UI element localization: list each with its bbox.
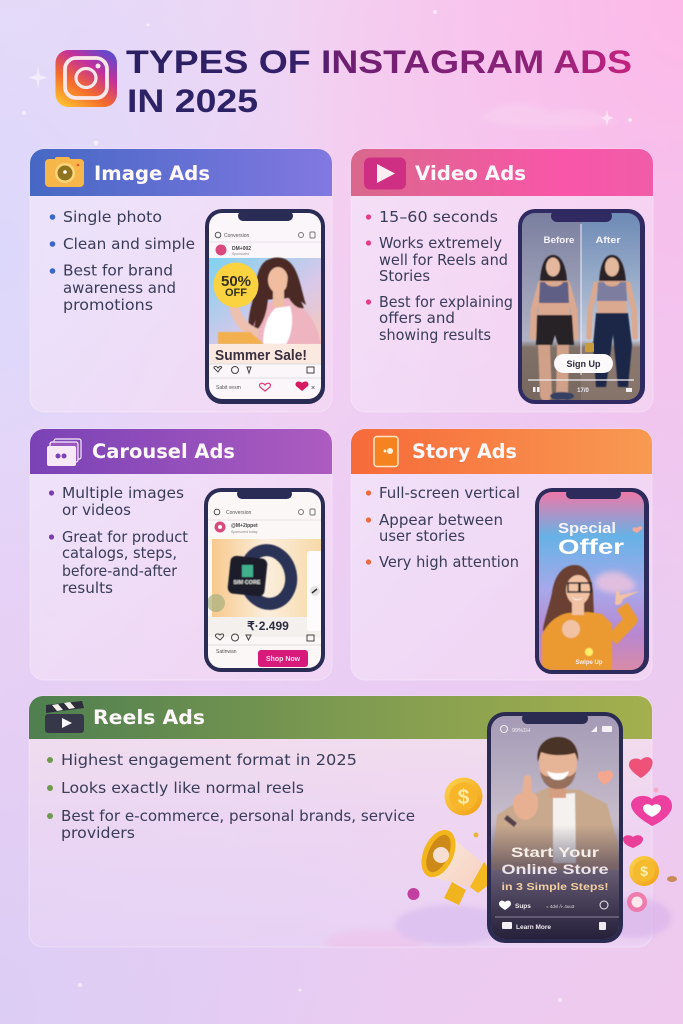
phone: reels ad: = 4dvl /i-.4uu3 [546, 904, 575, 909]
list: Image Ads bullets: Single photo [63, 208, 162, 226]
icon: play button [364, 158, 406, 190]
list: Image Ads bullets: awareness and [63, 279, 176, 297]
list: Carousel Ads bullets: or videos [62, 501, 131, 519]
list: Story Ads bullets: Appear between [379, 511, 503, 529]
header: Reels Ads: Reels Ads [93, 706, 205, 729]
list: Video Ads bullets [366, 208, 513, 344]
list: Reels Ads bullets: Looks exactly like normal reels [61, 779, 304, 797]
phone: Summer Sale post: Sabit vesm [216, 385, 241, 391]
icon: stacked cards [47, 439, 81, 466]
list: Carousel Ads bullets: results [62, 579, 113, 597]
list: Story Ads bullets: Very high attention [379, 553, 519, 571]
phone: reels ad: Start Your [511, 844, 600, 860]
panel: Video Ads [351, 149, 653, 412]
list: Carousel Ads bullets: before-and-after [62, 562, 178, 580]
icon: story card [374, 436, 398, 466]
phone: before and after video: 17/0 [577, 388, 589, 394]
title: IN 2025 [127, 83, 258, 119]
panel: Story Ads [351, 429, 652, 680]
phone: smartwatch carousel post: Satinwan [216, 649, 237, 655]
phone: reels ad: Sups [515, 903, 531, 910]
list: Image Ads bullets: promotions [63, 296, 153, 314]
title: TYPES OF INSTAGRAM ADS [126, 44, 632, 80]
phone: smartwatch carousel post: ₹·2.499 [247, 619, 289, 633]
icon: Instagram logo [56, 50, 117, 107]
list: Image Ads bullets: Best for brand [63, 262, 173, 280]
phone: reels ad: Online Store [502, 861, 609, 877]
phone: smartwatch carousel post: Shop Now [266, 656, 301, 663]
header: Video Ads: Video Ads [415, 162, 526, 185]
phone: reels ad: 99%1H [512, 728, 530, 734]
title [126, 44, 632, 119]
list: Carousel Ads bullets [49, 484, 188, 597]
header: Carousel Ads: Carousel Ads [92, 440, 235, 463]
phone: reels ad: in 3 Simple Steps! [502, 881, 608, 893]
phone: special offer story [535, 488, 649, 674]
icon: dollar coin left [444, 778, 482, 816]
icon: camera [45, 157, 84, 187]
icon: megaphone [408, 825, 489, 905]
list: Carousel Ads bullets: Great for product [62, 528, 188, 546]
header: Reels Ads [29, 696, 652, 739]
phone: Summer Sale post: 50% [221, 273, 251, 290]
phone: Summer Sale post: DM+002 [232, 246, 251, 252]
phone: special offer story: Special [558, 520, 616, 537]
phone: Summer Sale post: Summer Sale! [215, 348, 307, 364]
list: Reels Ads bullets [47, 751, 415, 842]
header: Carousel Ads [30, 429, 332, 474]
header: Story Ads: Story Ads [412, 440, 517, 463]
icons: floating hearts and coins [623, 757, 677, 912]
list: Video Ads bullets: Works extremely [379, 234, 502, 252]
list: Story Ads bullets: Full-screen vertical [379, 484, 520, 502]
list: Image Ads bullets [50, 208, 195, 314]
list: Reels Ads bullets: Best for e-commerce, personal brands, service [61, 807, 415, 825]
phone: special offer story: Offer [558, 536, 624, 559]
list: Video Ads bullets: showing results [379, 326, 491, 344]
list: Reels Ads bullets: providers [61, 824, 135, 842]
icon: dollar coin left: $ [458, 786, 470, 809]
phone: before and after video: Sign Up [566, 359, 601, 369]
phone: Summer Sale post: OFF [225, 287, 247, 299]
phone: Summer Sale post: Conversion [224, 233, 250, 239]
phone: smartwatch carousel post: Conversion [226, 510, 252, 516]
phone: special offer story: Swipe Up [575, 660, 603, 666]
list: Carousel Ads bullets: catalogs, steps, [62, 544, 177, 562]
icons: floating hearts and coins: $ [640, 863, 648, 879]
phone: before and after video [518, 209, 645, 404]
phone: reels ad: Learn More [516, 924, 551, 931]
phone: reels ad [487, 712, 623, 943]
phone: smartwatch carousel post: @M+2ippet [231, 523, 258, 529]
list: Video Ads bullets: offers and [379, 309, 455, 327]
panel: Carousel Ads [30, 429, 332, 680]
phone: Summer Sale post [205, 209, 325, 404]
header: Image Ads: Image Ads [94, 162, 210, 185]
list: Image Ads bullets: Clean and simple [63, 235, 195, 253]
header: Image Ads [30, 149, 332, 196]
icon: clapperboard [45, 701, 84, 733]
list: Carousel Ads bullets: Multiple images [62, 484, 184, 502]
list: Story Ads bullets [366, 484, 520, 571]
phone: smartwatch carousel post [204, 488, 325, 672]
phone: smartwatch carousel post: SIM CORE [233, 580, 261, 586]
list: Video Ads bullets: well for Reels and [379, 251, 508, 269]
list: Reels Ads bullets: Highest engagement format in 2025 [61, 751, 357, 769]
after figure [599, 255, 626, 283]
list: Video Ads bullets: Stories [379, 267, 430, 285]
phone: smartwatch carousel post: Sponsored today [231, 530, 258, 534]
phone: Summer Sale post: × [311, 385, 315, 392]
panel: Image Ads [30, 149, 332, 412]
panel: Reels Ads [29, 696, 677, 954]
phone: Summer Sale post: Sponsored [232, 252, 249, 256]
list: Video Ads bullets: 15–60 seconds [379, 208, 498, 226]
list: Story Ads bullets: user stories [379, 527, 465, 545]
phone: before and after video: Before [544, 235, 574, 245]
header: Video Ads [351, 149, 653, 196]
before figure [540, 255, 567, 281]
list: Video Ads bullets: Best for explaining [379, 293, 513, 311]
phone: before and after video: After [596, 235, 621, 245]
header: Story Ads [351, 429, 652, 474]
